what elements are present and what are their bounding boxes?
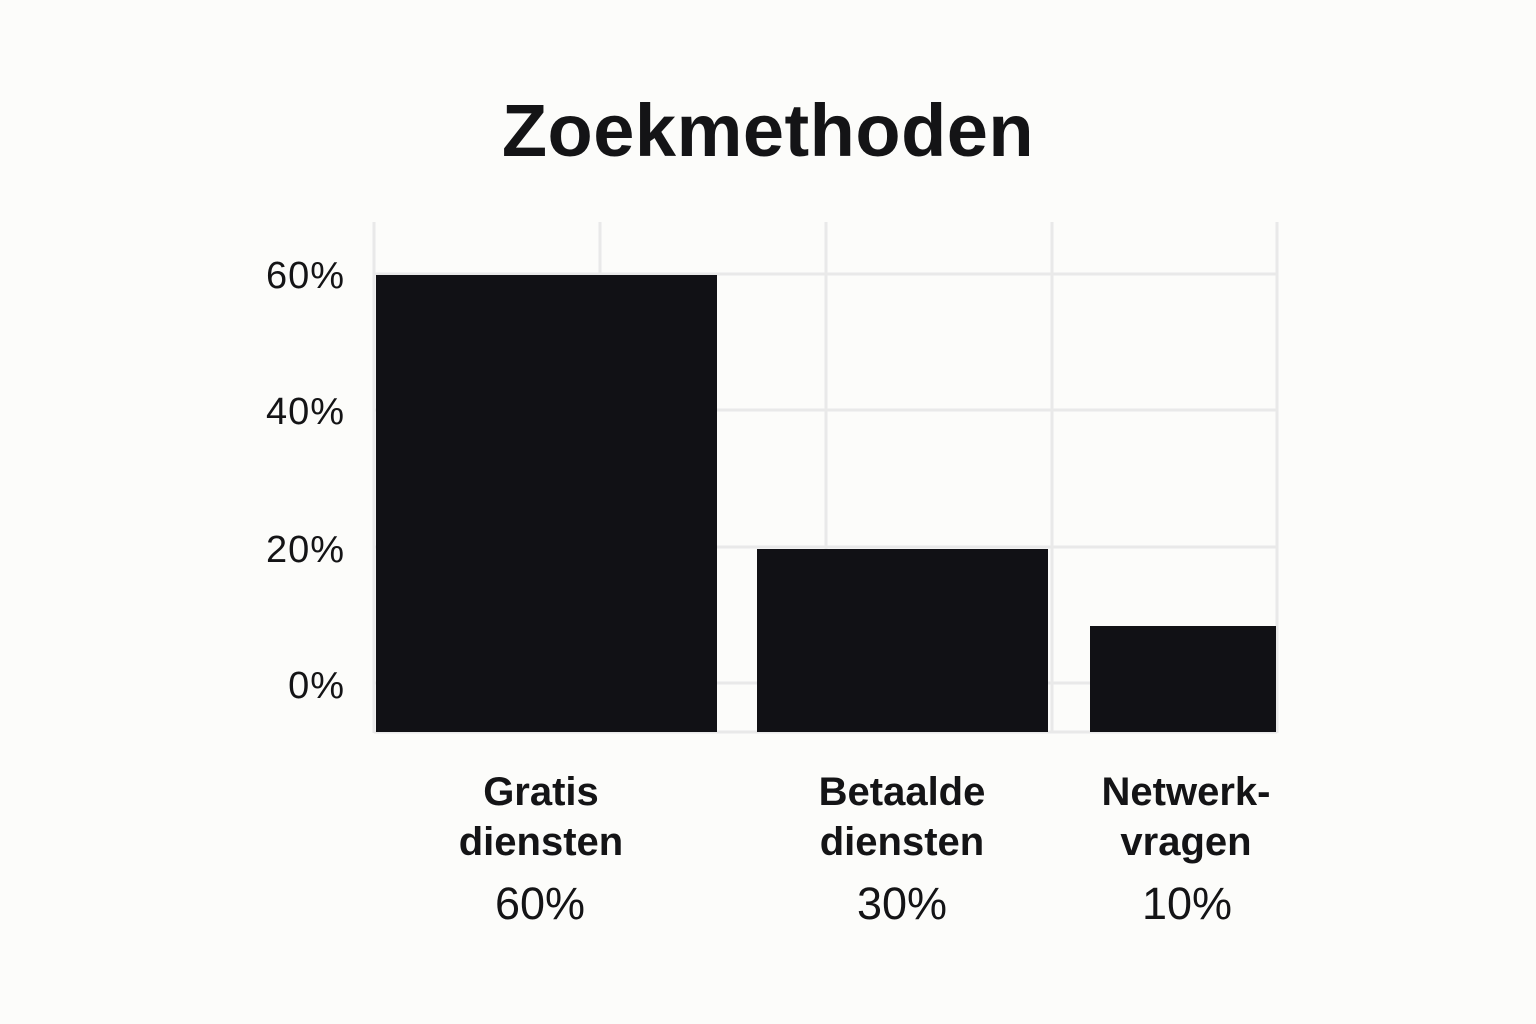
x labels: diensten	[820, 820, 984, 864]
x labels: Betaalde	[819, 770, 985, 814]
x labels	[459, 770, 1270, 929]
x labels: 10%	[1142, 878, 1232, 929]
y axis labels: 0%	[288, 665, 345, 707]
bar chart	[376, 275, 1276, 732]
x labels: vragen	[1120, 820, 1252, 864]
y axis labels: 60%	[266, 255, 345, 297]
x labels: Netwerk-	[1102, 770, 1270, 814]
x labels: diensten	[459, 820, 623, 864]
y axis labels: 40%	[266, 391, 345, 433]
x labels: 60%	[495, 878, 585, 929]
y axis labels	[266, 255, 345, 707]
x labels: 30%	[857, 878, 947, 929]
y axis labels: 20%	[266, 529, 345, 571]
title: Zoekmethoden	[502, 89, 1034, 172]
x labels: Gratis	[483, 770, 599, 814]
